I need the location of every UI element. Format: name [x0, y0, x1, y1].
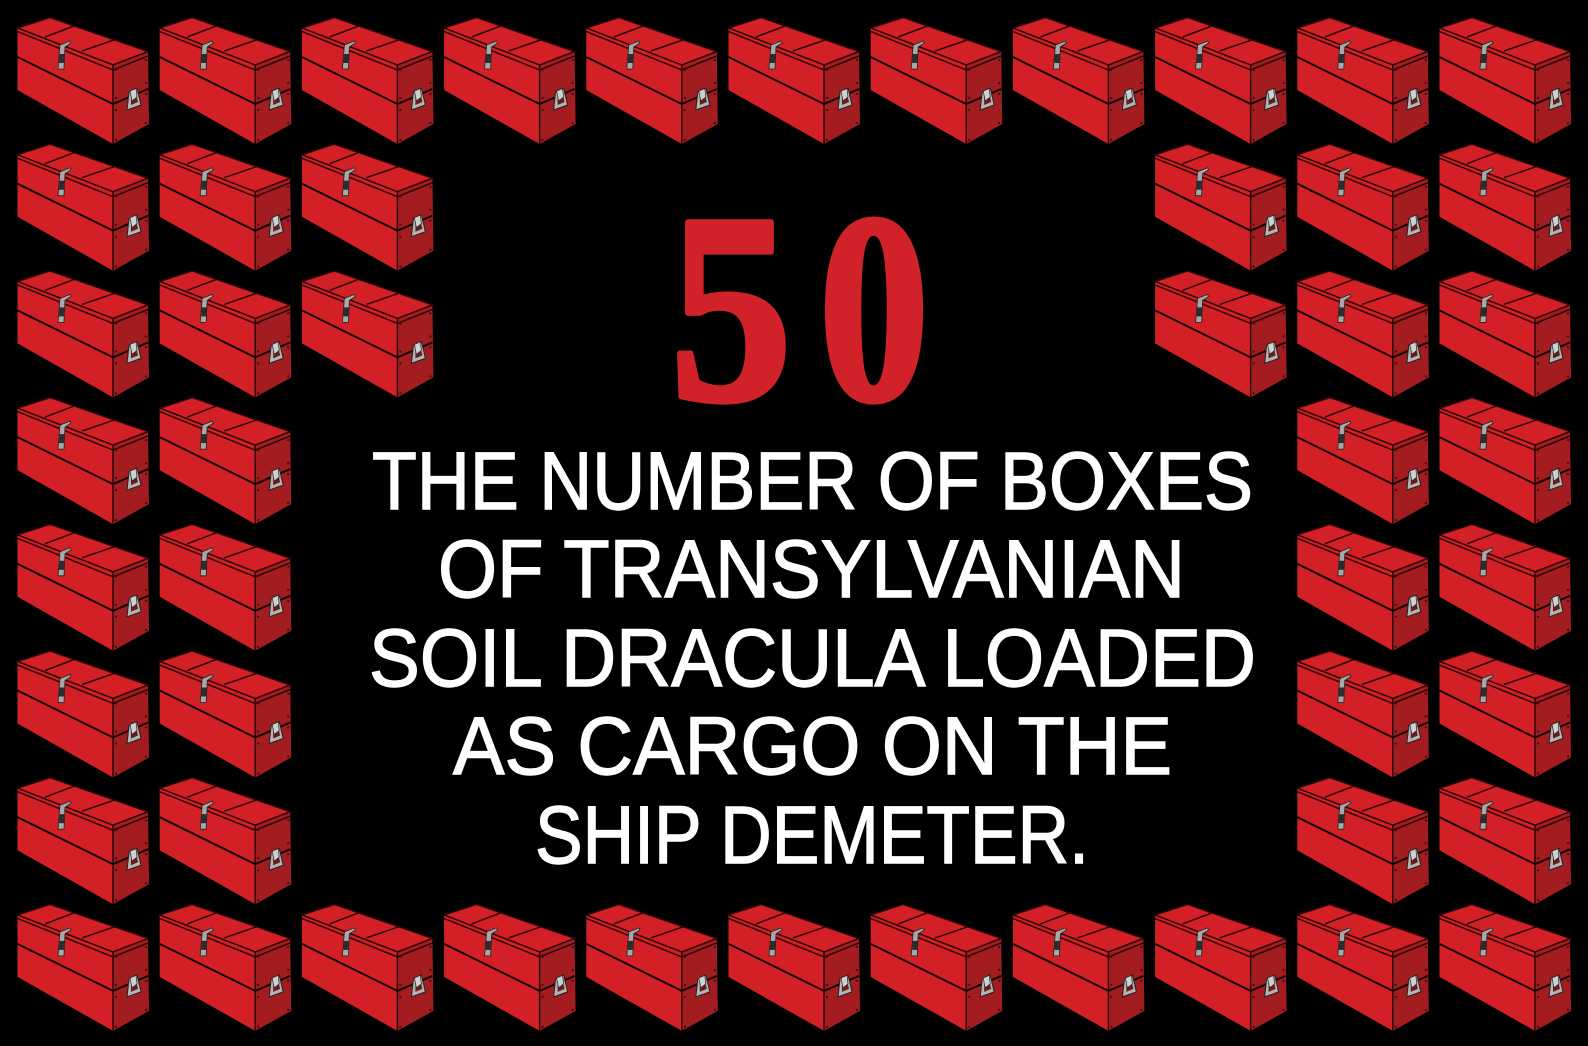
icon: toolbox	[302, 144, 433, 271]
top row of toolboxes	[18, 18, 1571, 144]
icon: toolbox	[1297, 144, 1429, 271]
icon: toolbox	[160, 398, 291, 524]
icon: toolbox	[1297, 904, 1429, 1031]
icon: toolbox	[18, 18, 149, 144]
icon: toolbox	[1013, 904, 1144, 1031]
icon: toolbox	[1440, 398, 1571, 524]
icon: toolbox	[1297, 398, 1429, 524]
icon: toolbox	[728, 904, 860, 1031]
icon: toolbox	[18, 904, 149, 1031]
caption text: AS CARGO ON THE	[453, 701, 1172, 792]
big number 50: 0	[819, 159, 929, 458]
caption text: OF TRANSYLVANIAN	[438, 524, 1185, 615]
icon: toolbox	[1155, 271, 1287, 397]
icon: toolbox	[1297, 651, 1429, 778]
right column of toolboxes	[1155, 144, 1571, 904]
icon: toolbox	[18, 271, 149, 397]
big number 50	[670, 159, 929, 458]
icon: toolbox	[1297, 18, 1429, 144]
icon: toolbox	[18, 144, 149, 271]
icon: toolbox	[302, 904, 433, 1031]
bottom row of toolboxes	[18, 904, 1571, 1031]
icon: toolbox	[1440, 18, 1571, 144]
icon: toolbox	[1440, 271, 1571, 397]
big number 50: 5	[670, 159, 792, 458]
icon: toolbox	[18, 651, 149, 778]
icon: toolbox	[586, 18, 718, 144]
icon: toolbox	[160, 144, 291, 271]
icon: toolbox	[586, 904, 718, 1031]
icon: toolbox	[1297, 271, 1429, 397]
icon: toolbox	[1013, 18, 1144, 144]
icon: toolbox	[1297, 524, 1429, 651]
icon: toolbox	[18, 778, 149, 904]
icon: toolbox	[728, 18, 860, 144]
icon: toolbox	[1155, 904, 1287, 1031]
icon: toolbox	[1297, 778, 1429, 904]
icon: toolbox	[302, 271, 433, 397]
icon: toolbox	[160, 524, 291, 651]
caption text: THE NUMBER OF BOXES	[372, 436, 1253, 527]
icon: toolbox	[1440, 778, 1571, 904]
icon: toolbox	[444, 18, 576, 144]
icon: toolbox	[18, 524, 149, 651]
icon: toolbox	[871, 904, 1002, 1031]
icon: toolbox	[302, 18, 433, 144]
icon: toolbox	[1440, 524, 1571, 651]
caption text	[369, 436, 1256, 881]
icon: toolbox	[160, 18, 291, 144]
icon: toolbox	[160, 778, 291, 904]
icon: toolbox	[1155, 144, 1287, 271]
icon: toolbox	[1440, 904, 1571, 1031]
icon: toolbox	[871, 18, 1002, 144]
caption text: SOIL DRACULA LOADED	[369, 613, 1256, 704]
icon: toolbox	[160, 904, 291, 1031]
icon: toolbox	[444, 904, 576, 1031]
icon: toolbox	[1155, 18, 1287, 144]
icon: toolbox	[1440, 651, 1571, 778]
icon: toolbox	[18, 398, 149, 524]
caption text: SHIP DEMETER.	[535, 790, 1089, 881]
icon: toolbox	[160, 271, 291, 397]
icon: toolbox	[1440, 144, 1571, 271]
icon: toolbox	[160, 651, 291, 778]
left column of toolboxes	[18, 144, 433, 904]
